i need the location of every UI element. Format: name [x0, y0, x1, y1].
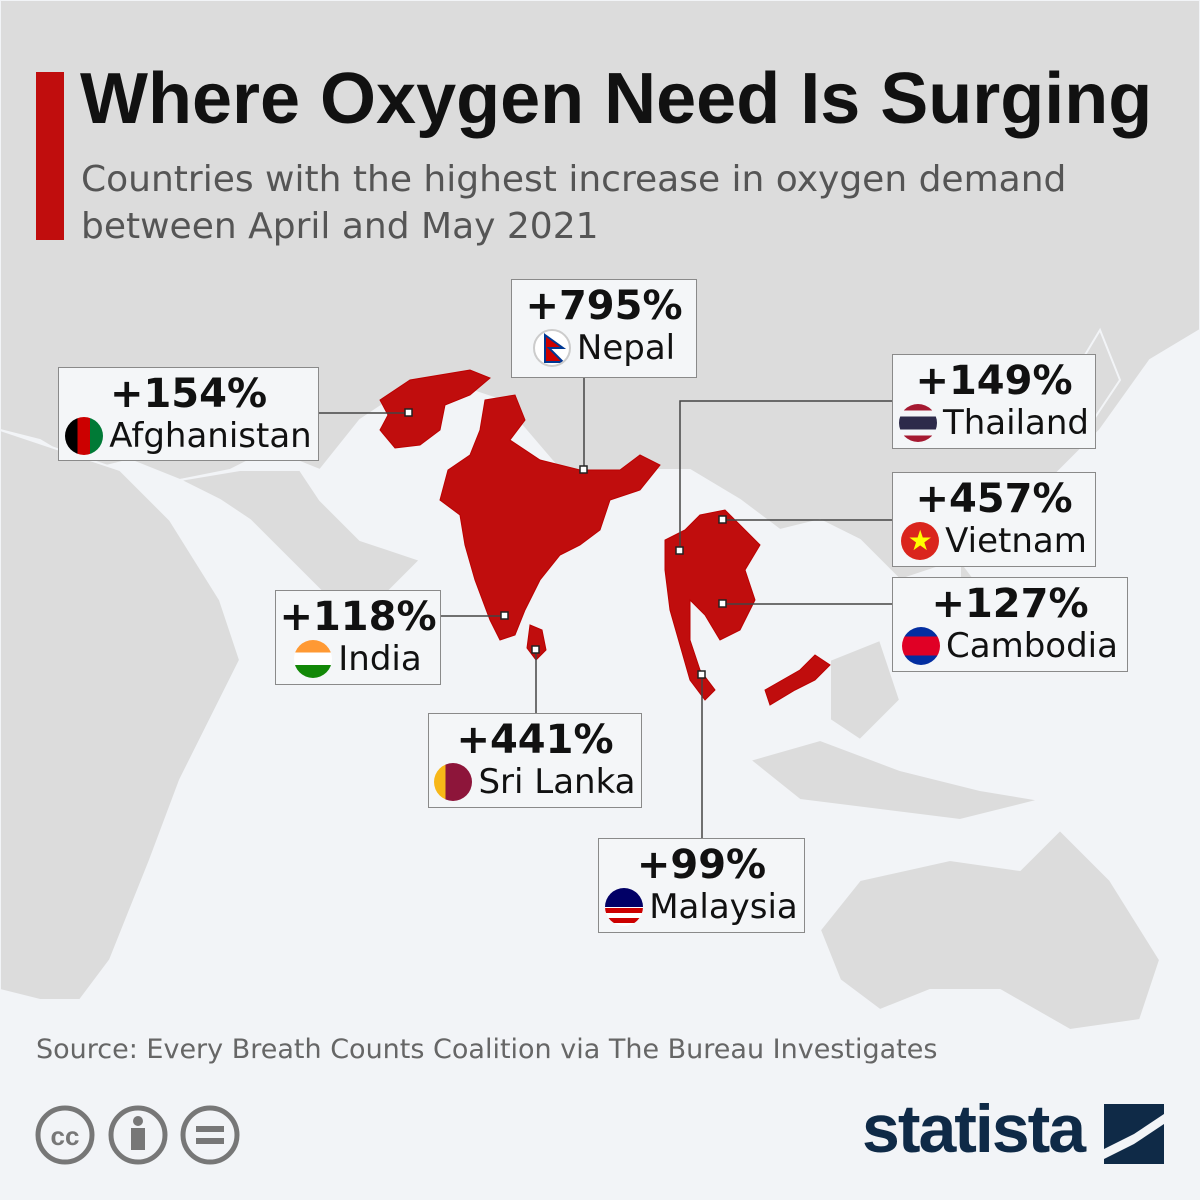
title accent bar	[36, 72, 64, 240]
callout: India: India	[338, 639, 422, 679]
callout: Sri Lanka: +441%	[456, 717, 614, 763]
callout: Vietnam: ★	[908, 524, 933, 557]
callout: Malaysia: +99%	[637, 842, 766, 888]
callout: Sri Lanka	[428, 713, 642, 808]
source: Source: Every Breath Counts Coalition via The Bureau Investigates	[36, 1034, 937, 1065]
subtitle	[81, 159, 1066, 247]
callout: Thailand: +149%	[915, 358, 1073, 404]
callout: Afghanistan	[58, 367, 319, 461]
callout: Nepal: +795%	[525, 283, 683, 329]
callout: Vietnam: Vietnam	[945, 521, 1087, 561]
callout: Thailand: Thailand	[943, 403, 1089, 443]
callout: Cambodia: +127%	[931, 581, 1089, 627]
leader lines	[319, 378, 892, 838]
callout: India	[275, 590, 441, 685]
callout: Vietnam	[892, 472, 1096, 567]
callout: Cambodia: Cambodia	[946, 626, 1118, 666]
subtitle: between April and May 2021	[81, 206, 598, 247]
license icons: cc	[51, 1121, 79, 1151]
callout: Nepal	[511, 279, 697, 378]
license icons	[36, 1106, 240, 1164]
callout: India: +118%	[279, 594, 437, 640]
subtitle: Countries with the highest increase in oxygen demand	[81, 159, 1066, 200]
callout: Nepal: Nepal	[577, 328, 675, 368]
callout: Thailand	[892, 354, 1096, 449]
statista logo: statista	[862, 1091, 1084, 1167]
title: Where Oxygen Need Is Surging	[80, 59, 1152, 139]
callout: Malaysia: Malaysia	[649, 887, 798, 927]
callout: Afghanistan: Afghanistan	[109, 416, 312, 456]
callout: Sri Lanka: Sri Lanka	[478, 762, 636, 802]
callout: Cambodia	[892, 577, 1128, 672]
callout: Malaysia	[598, 838, 805, 933]
callout: Vietnam: +457%	[915, 476, 1073, 522]
callout: Afghanistan: +154%	[110, 371, 267, 417]
red countries	[380, 370, 830, 705]
